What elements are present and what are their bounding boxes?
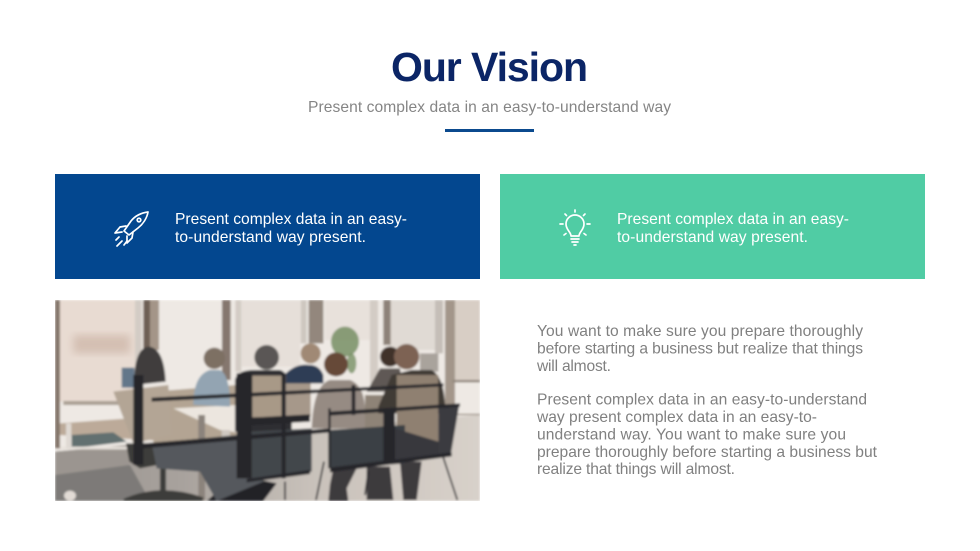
text block: paragraph two xyxy=(536,392,878,478)
callout text xyxy=(175,211,407,246)
person back left xyxy=(134,347,166,385)
icon: rocket xyxy=(115,212,148,246)
icon: light bulb xyxy=(560,210,590,245)
callout text: to-understand way present. xyxy=(175,229,366,246)
text block: paragraph one: will almost. xyxy=(536,358,611,375)
callout text: Present complex data in an easy- xyxy=(175,211,407,228)
glass frames xyxy=(133,373,460,482)
two men right xyxy=(380,347,400,367)
text block: paragraph two: understand way. You want to make sure you xyxy=(537,427,846,444)
text block: paragraph two: realize that things will almost. xyxy=(537,461,735,478)
divider xyxy=(445,129,534,132)
callout text xyxy=(617,211,849,246)
text block: paragraph two: way present complex data in an easy-to- xyxy=(536,409,817,426)
callout text: Present complex data in an easy- xyxy=(617,211,849,228)
man facing front xyxy=(301,343,321,363)
text block: paragraph one xyxy=(536,323,863,375)
panel: blue callout xyxy=(55,174,480,279)
text block: paragraph two: prepare thoroughly before starting a business but xyxy=(537,444,878,461)
man center back xyxy=(254,345,279,370)
panel: green callout xyxy=(500,174,925,279)
plant xyxy=(331,327,359,373)
callout text: to-understand way present. xyxy=(617,229,808,246)
chair left xyxy=(113,385,172,443)
woman left xyxy=(204,348,225,369)
dark glass table panels xyxy=(152,432,263,501)
text block: paragraph one: before starting a business but realize that things xyxy=(537,341,863,358)
woman right back xyxy=(324,352,348,376)
subtitle: Present complex data in an easy-to-understand way xyxy=(308,99,671,116)
text block: paragraph one: You want to make sure you prepare thoroughly xyxy=(537,323,863,340)
legs xyxy=(328,462,422,501)
columns xyxy=(55,300,60,448)
table and surfaces behind the glass xyxy=(153,385,237,443)
title: Our Vision xyxy=(391,44,588,90)
text block: paragraph two: Present complex data in an easy-to-understand xyxy=(537,392,867,409)
floor xyxy=(127,414,480,501)
photo: team meeting behind glass xyxy=(55,300,480,501)
